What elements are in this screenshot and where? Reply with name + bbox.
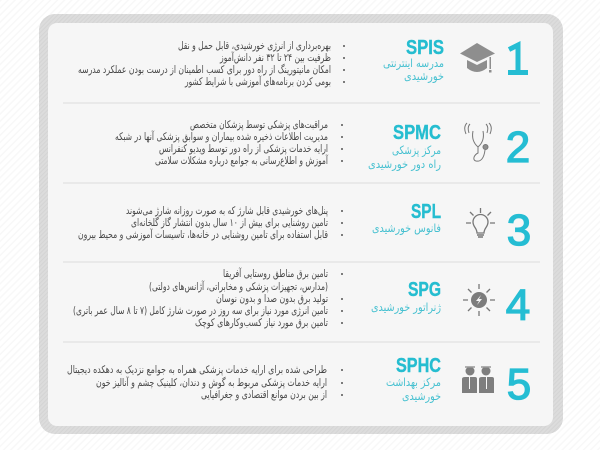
text block: SPL features: تامین روشنایی برای بیش از ۱۰ سال بدون انتشار گاز گلخانه‌ای (131, 216, 328, 229)
text block: SPG features: تامین برق مورد نیاز کسب‌وکارهای کوچک (195, 317, 328, 329)
subtitle: SPMC: راه دور خورشیدی (368, 157, 441, 172)
icon: light bulb (466, 208, 495, 237)
number: 4: 4 (506, 281, 530, 330)
panel: SPHC (67, 355, 531, 409)
text block: SPL features: قابل استفاده برای تامین روشنایی در خانه‌ها، تاسیسات آموزشی و محیط بیرون (78, 228, 328, 241)
subtitle: SPL: فانوس خورشیدی (372, 221, 441, 236)
text block: SPMC features: آموزش و اطلاع‌رسانی به جوامع درباره مشکلات سلامتی (155, 154, 329, 167)
text block: SPMC features: مراقبت‌های پزشکی توسط پزشکان متخصص (190, 119, 328, 131)
subtitle: SPIS (383, 56, 444, 84)
text block: SPHC features: طراحی شده برای ارایه خدمات پزشکی همراه به جوامع نزدیک به دهکده دیجیتال (67, 364, 327, 376)
text block: SPIS features: بومی کردن برنامه‌های آموزشی با شرایط کشور (184, 75, 331, 88)
text block: SPG features: تولید برق بدون صدا و بدون نوسان (216, 293, 328, 305)
text block: SPIS features: ظرفیت بین ۲۴ تا ۳۲ نفر دانش‌آموز (219, 51, 331, 64)
text block: SPHC features (67, 364, 343, 401)
text block: SPG features: (مدارس، تجهیزات پزشکی و مخابراتی، آژانس‌های دولتی) (149, 280, 328, 293)
number: 2: 2 (506, 123, 530, 172)
number: 3: 3 (507, 206, 531, 255)
subtitle: SPIS: مدرسه اینترنتی (383, 56, 444, 71)
subtitle: SPHC: خورشیدی (402, 389, 441, 404)
heading: SPMC: SPMC (393, 122, 441, 144)
icon: sun with bolt (463, 284, 495, 316)
text block: SPMC features (115, 119, 343, 167)
subtitle: SPIS: خورشیدی (404, 69, 444, 84)
heading: SPG: SPG (408, 279, 441, 301)
icon: two doctors (462, 366, 494, 393)
heading: SPL: SPL (411, 201, 441, 223)
icon: graduation cap (460, 43, 495, 72)
heading: SPIS: SPIS (406, 37, 444, 59)
text block: SPHC features: از بین بردن موانع اقتصادی و جغرافیایی (201, 389, 327, 401)
text block: SPIS features: امکان مانیتورینگ از راه دور برای کسب اطمینان از درست بودن عملکرد مدرسه (78, 63, 331, 76)
text block: SPG features: تامین انرژی مورد نیاز برای سه روز در صورت شارژ کامل (۷ تا ۸ سال عمر باتری) (73, 305, 328, 317)
subtitle: SPHC (386, 375, 441, 404)
heading: SPHC: SPHC (396, 355, 441, 377)
panel: SPG (73, 267, 530, 330)
panel: SPIS (78, 37, 528, 88)
text block: SPHC features: ارایه خدمات پزشکی مربوط به گوش و دندان، کلینیک چشم و آنالیز خون (96, 376, 327, 389)
subtitle: SPG: ژنراتور خورشیدی (371, 300, 441, 315)
number: 5: 5 (507, 360, 531, 409)
text block: SPMC features: مدیریت اطلاعات ذخیره شده بیماران و سوابق پزشکی آنها در شبکه (115, 130, 328, 143)
text block: SPG features (73, 267, 343, 329)
subtitle: SPMC (368, 143, 441, 172)
text block: SPMC features: ارایه خدمات پزشکی از راه دور توسط ویدیو کنفرانس (159, 143, 328, 155)
number: 1 (508, 45, 528, 72)
panel: SPMC (115, 119, 530, 172)
text block: SPG features: تامین برق مناطق روستایی آفریقا (223, 267, 328, 280)
text block: SPIS features: بهره‌برداری از انرژی خورشیدی، قابل حمل و نقل (178, 40, 331, 52)
icon: stethoscope (465, 123, 491, 161)
text block: SPL features: پنل‌های خورشیدی قابل شارژ که به صورت روزانه شارژ می‌شوند (126, 205, 328, 217)
text block: SPL features (78, 205, 343, 241)
text block: SPIS features (78, 40, 345, 88)
subtitle: SPHC: مرکز بهداشت (386, 375, 441, 390)
subtitle: SPMC: مرکز پزشکی (392, 143, 441, 158)
panel: SPL (78, 201, 531, 255)
